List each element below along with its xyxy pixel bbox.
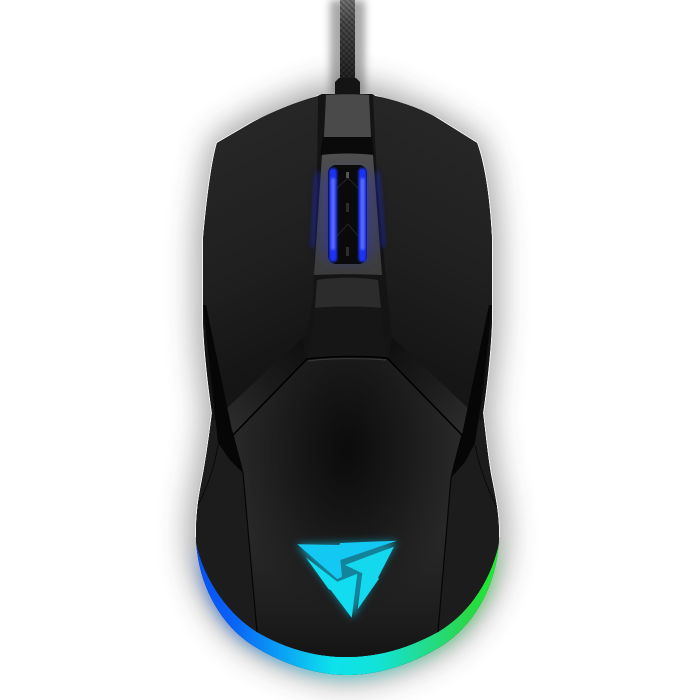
blue side spill right: [376, 172, 385, 247]
logo glow: [297, 541, 397, 618]
cable strain relief: [335, 78, 360, 95]
scroll wheel: [328, 165, 367, 264]
lower shell above the ring: [190, 90, 510, 657]
soft shadow around the mouse: [187, 84, 508, 684]
right button shoulder stripe: [424, 384, 468, 434]
right main button: [373, 96, 492, 322]
right side groove: [451, 305, 492, 478]
scroll wheel opening glow: [322, 172, 373, 260]
spine block: [308, 306, 386, 358]
illustration: gaming mouse, top view: [169, 0, 526, 700]
cable: [335, 0, 360, 95]
left side panel seam: [197, 445, 218, 507]
RGB light ring: [190, 530, 505, 680]
right blue LED bar: [358, 168, 366, 262]
left side groove: [203, 305, 243, 473]
mouse body: [190, 90, 510, 680]
blue side spill left: [311, 172, 319, 247]
cable shadow: [330, 0, 365, 95]
palm rest panel: [233, 357, 462, 657]
lower spine button: [315, 278, 381, 308]
right rear side panel: [438, 420, 499, 632]
RGB light ring glow: [195, 540, 500, 677]
DPI button: [324, 94, 371, 137]
left main button: [203, 96, 318, 318]
scroll wheel housing: [314, 154, 382, 275]
right side panel seam: [475, 445, 497, 507]
white rim: [196, 96, 499, 537]
wheel ribs: [337, 178, 358, 236]
left blue LED bar: [329, 168, 337, 262]
left button shoulder stripe: [228, 382, 272, 433]
logo: cyan angular emblem: [297, 541, 397, 618]
left rear side panel: [196, 422, 256, 632]
